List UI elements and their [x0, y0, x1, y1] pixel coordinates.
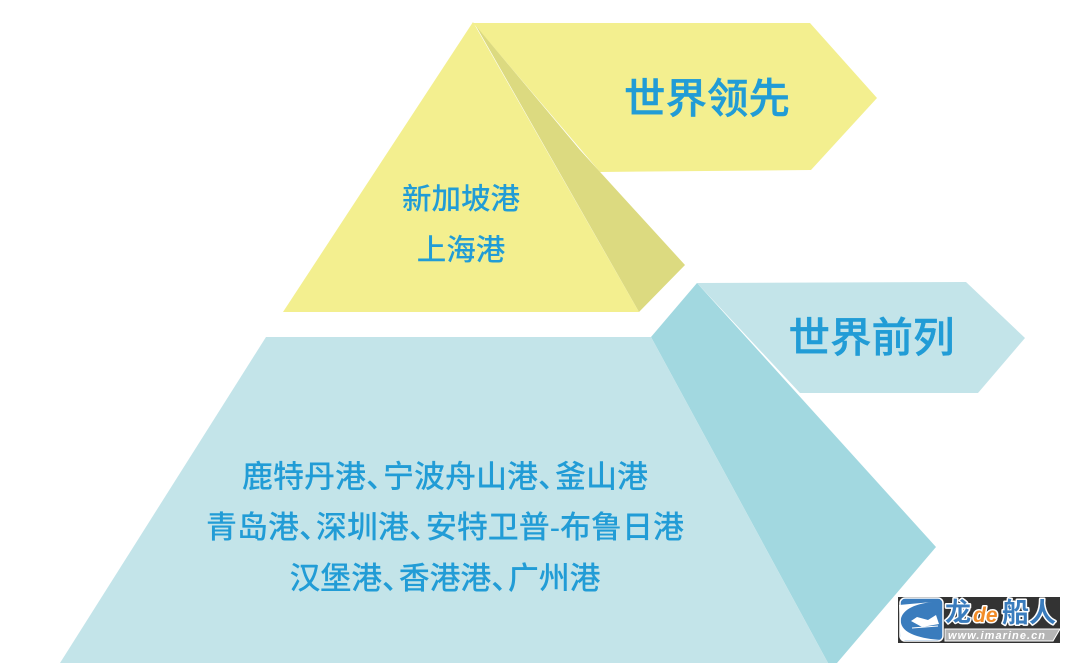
- logo ship person: 船人: [1002, 598, 1056, 628]
- pyramid front face: [60, 337, 828, 663]
- logo wordmark: 龙: [945, 597, 971, 627]
- arrow: world front rank: [697, 282, 1025, 393]
- arrow: world leading: [473, 23, 877, 172]
- upper tier: yellow pyramid: [283, 22, 877, 312]
- ports line 1: 鹿特丹港、宁波舟山港、釜山港: [242, 460, 648, 494]
- ports: Shanghai: 上海港: [417, 234, 506, 267]
- logo de: de: [973, 604, 998, 627]
- logo url bar: [945, 629, 1060, 641]
- ports line 3: 汉堡港、香港港、广州港: [290, 561, 600, 596]
- logo: imarine watermark: [898, 597, 1060, 643]
- lower tier: blue pyramid: [60, 282, 1025, 663]
- pyramid side face: [651, 283, 936, 663]
- pyramid front face: [283, 22, 639, 312]
- heading: world leading: 世界领先: [624, 75, 790, 122]
- heading: world front rank: 世界前列: [788, 314, 955, 361]
- logo url: www.imarine.cn: [948, 630, 1045, 642]
- ports: Singapore: 新加坡港: [402, 183, 520, 216]
- logo badge: [899, 598, 943, 641]
- ports line 2: 青岛港、深圳港、安特卫普-布鲁日港: [206, 510, 684, 545]
- pyramid side face: [476, 26, 685, 312]
- logo backing: [898, 597, 1060, 643]
